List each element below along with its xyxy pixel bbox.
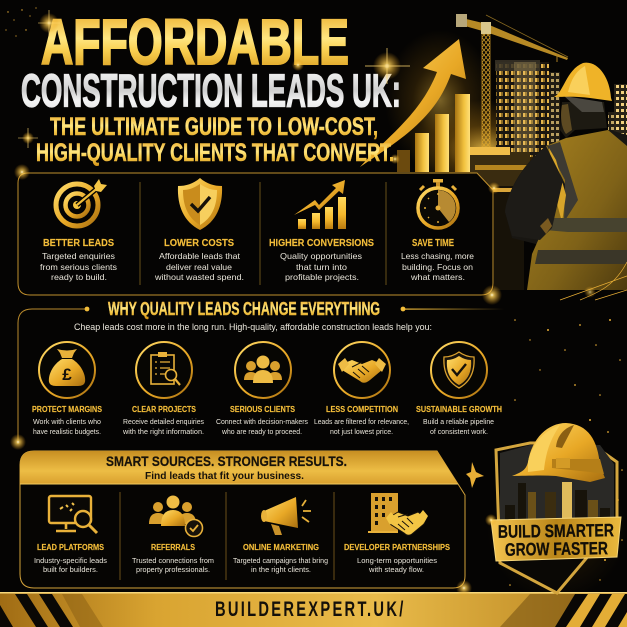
source: online marketing: ONLINE MARKETING (243, 542, 319, 552)
panel: smart sources (20, 451, 465, 588)
benefit: sustainable growth (416, 342, 502, 436)
source: lead platforms: built for builders. (43, 565, 98, 574)
source: lead platforms (34, 496, 107, 574)
website address: BUILDEREXPERT.UK/ (215, 597, 403, 621)
benefit: save time: Less chasing, more (401, 251, 474, 261)
scene: construction site with worker (360, 14, 627, 290)
source: developer partnerships: DEVELOPER PARTNERSHIPS (344, 542, 450, 552)
benefit: sustainable growth: Build a reliable pipeline (423, 417, 494, 426)
icon: shield (178, 178, 222, 230)
source: online marketing: Targeted campaigns that bring (233, 556, 328, 565)
title: AFFORDABLE (41, 6, 349, 78)
benefit: serious clients (216, 342, 308, 436)
icon: handshake (334, 342, 390, 398)
title: HIGH-QUALITY CLIENTS THAT CONVERT. (36, 139, 394, 167)
hard hat (512, 423, 605, 482)
icon: stopwatch (418, 179, 458, 228)
benefit: higher conversions: that turn into (296, 262, 347, 272)
benefit: better leads (40, 179, 117, 282)
benefit: less competition: LESS COMPETITION (326, 404, 398, 414)
badge: build smarter grow faster (487, 423, 627, 600)
benefit: lower costs: LOWER COSTS (164, 238, 234, 249)
benefit: serious clients: Connect with decision-makers (216, 417, 308, 426)
benefit: protect margins: PROTECT MARGINS (32, 404, 102, 414)
icon: money bag: £ (62, 365, 72, 384)
intro text: Cheap leads cost more in the long run. High-quality, affordable construction leads help you: (74, 322, 432, 332)
benefit: higher conversions: profitable projects. (285, 272, 359, 282)
icon: group of people (235, 342, 291, 398)
benefit: clear projects: CLEAR PROJECTS (132, 404, 196, 414)
icon: shield check (431, 342, 487, 398)
benefit: lower costs: without wasted spend. (154, 272, 244, 282)
source: developer partnerships (344, 493, 450, 574)
benefit: less competition: not just lowest price. (330, 427, 393, 436)
icon: target (56, 179, 107, 226)
source: lead platforms: Industry-specific leads (34, 556, 107, 565)
benefit: better leads: BETTER LEADS (43, 238, 114, 249)
source: developer partnerships: with steady flow. (368, 565, 424, 574)
source: online marketing (233, 497, 328, 574)
benefit: lower costs: Affordable leads that (159, 251, 241, 261)
benefit: clear projects: with the right information. (122, 427, 204, 436)
title: THE ULTIMATE GUIDE TO LOW-COST, (50, 113, 378, 141)
benefit: less competition (314, 342, 409, 436)
benefit: better leads: from serious clients (40, 262, 117, 272)
header band: SMART SOURCES. STRONGER RESULTS. (106, 454, 347, 469)
icon: monitor and magnifier (49, 496, 97, 533)
benefit: protect margins: Work with clients who (33, 417, 101, 426)
icon: rising chart (294, 180, 346, 229)
icon: people with check (149, 496, 202, 536)
benefit: save time: building. Focus on (402, 262, 473, 272)
benefit: sustainable growth: SUSTAINABLE GROWTH (416, 404, 502, 414)
city skyline (500, 445, 614, 525)
benefit: serious clients: SERIOUS CLIENTS (230, 404, 295, 414)
source: referrals: Trusted connections from (132, 556, 214, 565)
icon: building and handshake (368, 493, 428, 535)
benefit: protect margins: have realistic budgets. (33, 427, 101, 436)
benefit: clear projects (122, 342, 204, 436)
banner (491, 517, 621, 561)
source: online marketing: in the right clients. (251, 565, 311, 574)
benefit: lower costs (154, 178, 244, 282)
building (470, 60, 627, 290)
source: lead platforms: LEAD PLATFORMS (37, 542, 104, 552)
icon: megaphone (261, 497, 311, 535)
icon: clipboard and magnifier (136, 342, 192, 398)
source: referrals: property professionals. (136, 565, 210, 574)
heading: WHY QUALITY LEADS CHANGE EVERYTHING (108, 299, 380, 319)
growth chart arrow (360, 39, 470, 172)
title (21, 6, 401, 167)
crane (456, 14, 568, 158)
source: referrals (132, 496, 214, 574)
source: referrals: REFERRALS (151, 542, 195, 552)
benefit: save time: SAVE TIME (412, 238, 454, 249)
benefit: save time (401, 179, 474, 282)
header band (20, 451, 458, 484)
benefit: higher conversions: HIGHER CONVERSIONS (269, 238, 374, 249)
panel: why quality leads (18, 299, 504, 444)
benefit: less competition: Leads are filtered for relevance, (314, 417, 409, 426)
benefit: higher conversions (269, 180, 374, 282)
benefit: lower costs: deliver real value (166, 262, 232, 272)
benefit: serious clients: who are ready to proceed. (221, 427, 302, 436)
header band: Find leads that fit your business. (145, 470, 304, 482)
benefit: sustainable growth: of consistent work. (430, 427, 488, 436)
benefit: protect margins (32, 342, 102, 436)
worker (505, 63, 627, 290)
source: developer partnerships: Long-term opportunities (357, 556, 437, 565)
benefit: better leads: ready to build. (51, 272, 107, 282)
benefit: higher conversions: Quality opportunities (280, 251, 362, 261)
panel: benefits (18, 173, 493, 295)
benefit: clear projects: Receive detailed enquiries (123, 417, 204, 426)
footer bar (0, 592, 627, 627)
benefit: save time: what matters. (410, 272, 465, 282)
benefit: better leads: Targeted enquiries (42, 251, 115, 261)
